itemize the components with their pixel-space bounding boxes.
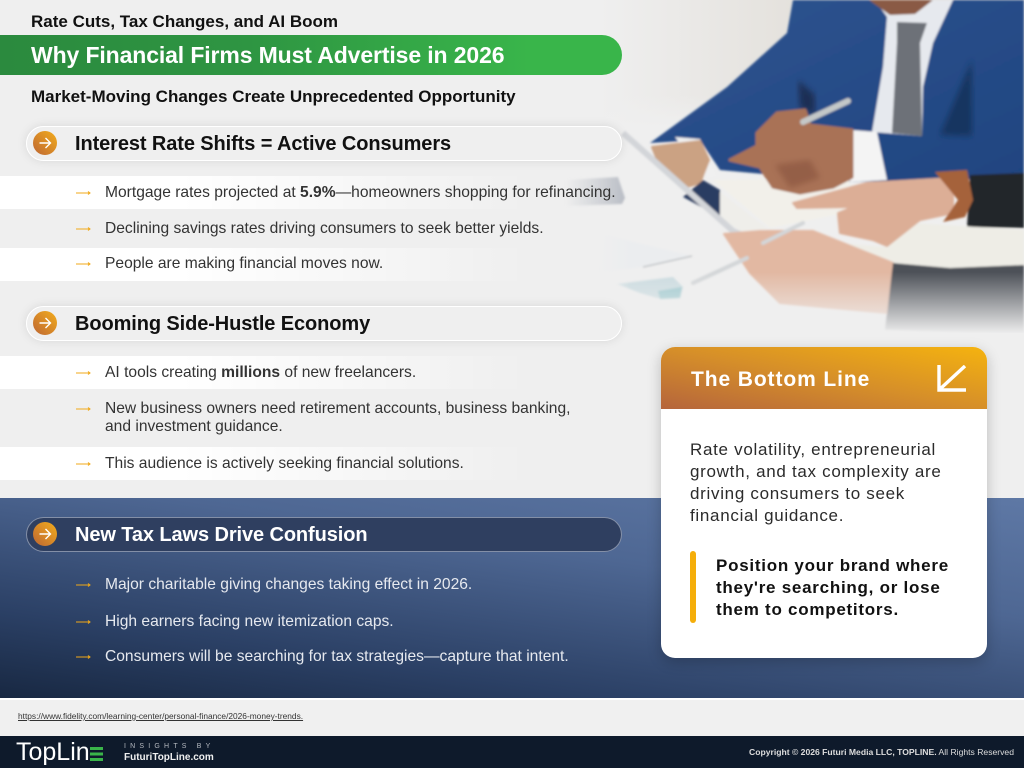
icon: paper notebook [713, 178, 850, 228]
bullet: People are making financial moves now. [105, 255, 383, 272]
panel: the bottom line [661, 347, 987, 658]
icon: watch [935, 170, 973, 222]
card body text: driving consumers to seek [690, 484, 905, 503]
footer bar [0, 736, 1024, 768]
footer strip [0, 698, 1024, 736]
icon: paper under hands [840, 223, 1024, 268]
source link: https://www.fidelity.com/learning-center/personal-finance/2026-money-trends. [18, 711, 303, 721]
icon: lower pen [693, 223, 803, 283]
bullet: Major charitable giving changes taking effect in 2026. [105, 576, 472, 593]
title: Why Financial Firms Must Advertise in 2026 [31, 42, 504, 68]
copyright: Copyright © 2026 Futuri Media LLC, TOPLINE. All Rights Reserved [749, 747, 1014, 757]
bullet: This audience is actively seeking financial solutions. [105, 455, 464, 472]
icon: orange arrow coin [33, 522, 57, 546]
row bands: section one [0, 176, 343, 281]
icon: desk papers and chart [600, 235, 692, 299]
section pill: tax laws [26, 517, 622, 552]
card body text [690, 440, 942, 525]
logo green bars [90, 747, 103, 761]
row bands: section two [0, 356, 343, 480]
icon: woman's pointing hand [793, 178, 953, 246]
website: FuturiTopLine.com [124, 752, 214, 763]
bullet: AI tools creating millions of new freelancers. [105, 364, 416, 381]
icon: pointing hand [730, 110, 852, 193]
card body text: growth, and tax complexity are [690, 462, 942, 481]
bullet: Consumers will be searching for tax strategies—capture that intent. [105, 648, 569, 665]
section heading: Interest Rate Shifts = Active Consumers [75, 133, 451, 155]
bullet: and investment guidance. [105, 418, 283, 435]
logo wordmark: TopLin [16, 738, 90, 766]
card callout text: Position your brand where [716, 556, 949, 575]
bullet: Declining savings rates driving consumers to seek better yields. [105, 220, 544, 237]
card body text: financial guidance. [690, 506, 844, 525]
kicker heading: Rate Cuts, Tax Changes, and AI Boom [31, 12, 338, 31]
icon: lower hand [724, 231, 893, 313]
title banner [0, 35, 622, 75]
bullet: Mortgage rates projected at 5.9%—homeowners shopping for refinancing. [105, 184, 616, 201]
icon: woman's sleeve [967, 173, 1024, 228]
section heading: New Tax Laws Drive Confusion [75, 524, 367, 546]
card header [661, 347, 987, 409]
photo: business people reviewing a tablet [575, 0, 1024, 331]
accent bar [690, 551, 696, 623]
icon: orange arrow coin [33, 311, 57, 335]
icon: shirt cuffs [675, 130, 887, 182]
icon: jacket and shirt [650, 0, 1024, 182]
logo: TopLine [16, 738, 103, 766]
icon: tablet [623, 133, 767, 241]
icon: orange arrow coin [33, 131, 57, 155]
icon: grey sleeve [885, 263, 1024, 335]
icon: keyboard corner [565, 177, 625, 206]
icon: left hand [652, 141, 709, 188]
card callout text: they're searching, or lose [716, 578, 941, 597]
panel: tax laws [0, 498, 1024, 698]
insights by label: INSIGHTS BY [124, 743, 215, 750]
bullet [76, 400, 570, 435]
section pill: interest rates [26, 126, 622, 161]
icon: down-left arrow [937, 365, 966, 392]
card callout text: them to competitors. [716, 600, 899, 619]
card body text: Rate volatility, entrepreneurial [690, 440, 936, 459]
section heading: Booming Side-Hustle Economy [75, 313, 370, 335]
bullet: New business owners need retirement accounts, business banking, [105, 400, 570, 417]
subtitle: Market-Moving Changes Create Unprecedented Opportunity [31, 87, 516, 106]
icon: pen in man's hand [803, 101, 848, 122]
section pill: side hustle [26, 306, 622, 341]
bullet: High earners facing new itemization caps. [105, 613, 394, 630]
card callout text [716, 556, 949, 619]
card heading: The Bottom Line [691, 368, 870, 391]
